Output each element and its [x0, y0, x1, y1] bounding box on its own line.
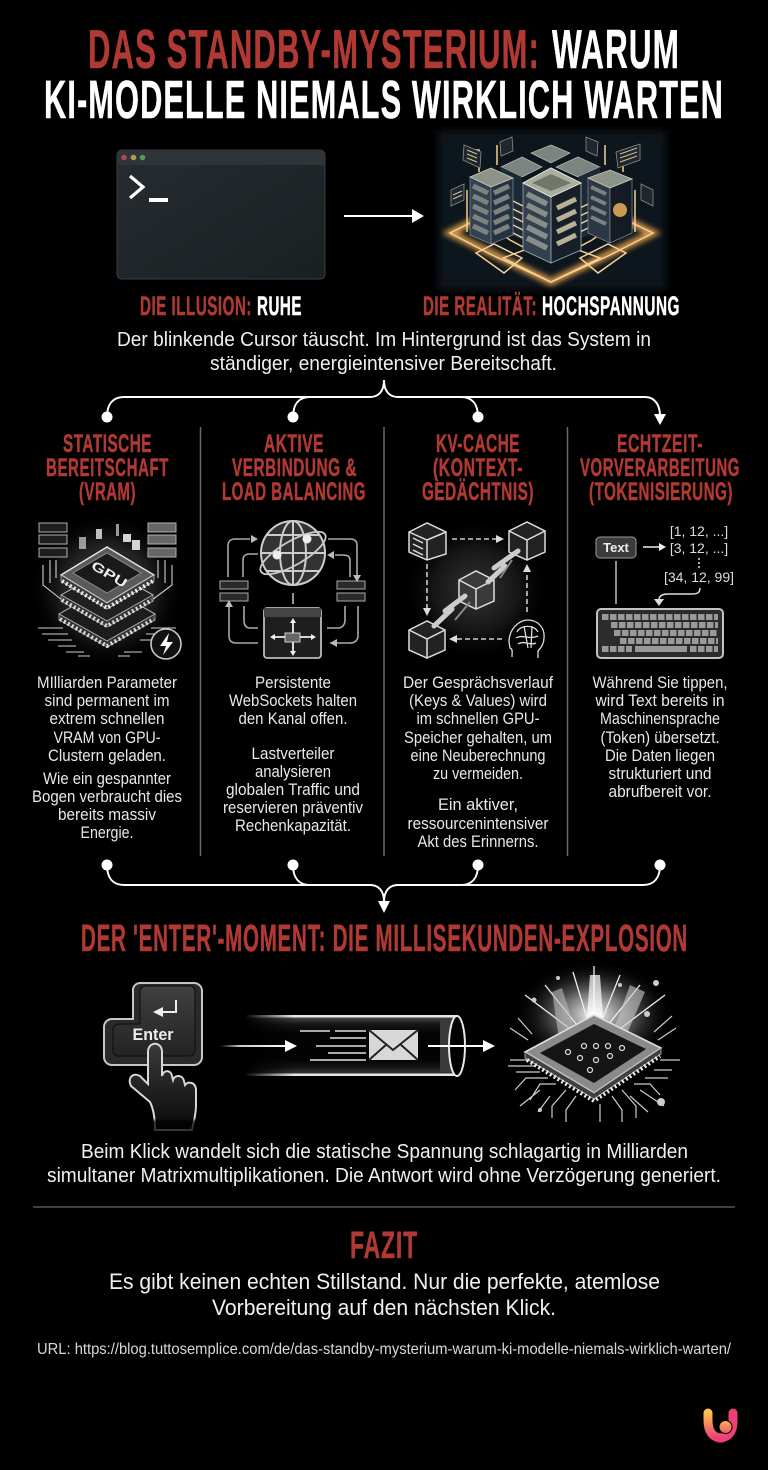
enter moment text: [47, 1141, 721, 1187]
text: real-time tokenization: [592, 673, 728, 801]
conclusion text: Es gibt keinen echten Stillstand. Nur die perfekte, atemlose: [109, 1269, 660, 1294]
text: active connection: Lastverteiler: [252, 744, 335, 763]
enter moment text: Beim Klick wandelt sich die statische Spannung schlagartig in Milliarden: [81, 1141, 688, 1163]
icon: GPU chip: [29, 512, 185, 668]
arrow: out of the tube: [428, 1040, 495, 1052]
text: static readiness: bereits massiv: [58, 805, 156, 824]
icon: data tube with envelope: [244, 1013, 465, 1078]
text: active connection: Rechenkapazität.: [235, 816, 351, 835]
icon: enter key with hand: Enter: [132, 1025, 174, 1044]
icon: server cluster: [438, 130, 666, 290]
conclusion text: Vorbereitung auf den nächsten Klick.: [212, 1295, 556, 1320]
text: active connection: Persistente: [255, 673, 331, 692]
text: static readiness: VRAM von GPU-: [54, 728, 160, 747]
text: static readiness: Energie.: [80, 823, 134, 842]
text: static readiness: Wie ein gespannter: [43, 769, 171, 788]
icon: text to tokens and keyboard: Text: [603, 540, 630, 555]
intro text: ständiger, energieintensiver Bereitschaft.: [210, 353, 557, 375]
text: active connection: analysieren: [255, 762, 331, 781]
text: real-time tokenization: Während Sie tippen,: [592, 673, 728, 692]
text: active connection: globalen Traffic und: [226, 780, 360, 799]
text: KV cache: Speicher gehalten, um: [404, 728, 552, 747]
text: active connection: den Kanal offen.: [238, 709, 348, 728]
icon: GPU chip: GPU: [89, 559, 129, 591]
text: static readiness: Bogen verbraucht dies: [32, 787, 182, 806]
heading: active connection: AKTIVE: [264, 430, 324, 458]
heading: KV cache: GEDÄCHTNIS): [422, 478, 534, 506]
text: static readiness: MIlliarden Parameter: [37, 673, 177, 692]
text: KV cache: eine Neuberechnung: [410, 746, 546, 765]
heading: real-time tokenization: [580, 430, 740, 506]
text: real-time tokenization: abrufbereit vor.: [608, 782, 712, 801]
arrow: into the tube: [220, 1040, 297, 1052]
heading: active connection: LOAD BALANCING: [222, 478, 366, 506]
text: static readiness: sind permanent im: [44, 691, 170, 710]
enter moment text: simultaner Matrixmultiplikationen. Die Antwort wird ohne Verzögerung generiert.: [47, 1165, 721, 1187]
heading: KV cache: [422, 430, 534, 506]
label: illusion: DIE ILLUSION:: [140, 291, 252, 321]
icon: exploding processor: [508, 960, 680, 1122]
text: KV cache: ressourcenintensiver: [408, 814, 549, 833]
text: static readiness: extrem schnellen: [50, 709, 164, 728]
heading: KV cache: (KONTEXT-: [433, 454, 523, 482]
icon: globe and load balancer: [220, 521, 365, 658]
heading: active connection: VERBINDUNG &: [232, 454, 357, 482]
intro text: Der blinkende Cursor täuscht. Im Hintergrund ist das System in: [117, 329, 651, 351]
heading: conclusion: FAZIT: [350, 1225, 418, 1267]
intro text: [117, 329, 651, 375]
text: real-time tokenization: Die Daten liegen: [605, 746, 715, 765]
icon: text to tokens and keyboard: [596, 523, 734, 658]
panel: static readiness: [29, 430, 185, 842]
text: static readiness: [32, 673, 182, 842]
title: [44, 18, 724, 130]
heading: static readiness: BEREITSCHAFT: [46, 454, 169, 482]
heading: static readiness: (VRAM): [79, 478, 136, 506]
panel: real-time tokenization: [580, 430, 740, 801]
text: active connection: [223, 673, 363, 835]
text: KV cache: Ein aktiver,: [438, 795, 518, 814]
conclusion text: [109, 1269, 660, 1320]
text: KV cache: (Keys & Values) wird: [409, 691, 547, 710]
text: real-time tokenization: strukturiert und: [608, 764, 712, 783]
text: active connection: WebSockets halten: [229, 691, 357, 710]
text: KV cache: zu vermeiden.: [433, 764, 523, 783]
icon: text to tokens and keyboard: [1, 12, ...]: [670, 523, 728, 539]
icon: chained memory cubes: [404, 518, 548, 662]
text: KV cache: [403, 673, 553, 851]
text: KV cache: Der Gesprächsverlauf: [403, 673, 553, 692]
text: real-time tokenization: (Token) übersetzt.: [600, 728, 720, 747]
heading: static readiness: [46, 430, 169, 506]
text: KV cache: Akt des Erinnerns.: [418, 832, 538, 851]
text: real-time tokenization: Maschinensprache: [600, 709, 720, 728]
heading: active connection: [222, 430, 366, 506]
bottom merging connector: [102, 860, 666, 913]
panel: KV cache: [403, 430, 553, 851]
arrow: illusion to reality: [344, 209, 424, 223]
heading: KV cache: KV-CACHE: [436, 430, 520, 458]
text: real-time tokenization: wird Text bereits in: [595, 691, 724, 710]
icon: text to tokens and keyboard: [34, 12, 99]: [664, 569, 734, 585]
source URL: URL: https://blog.tuttosemplice.com/de/das-standby-mysterium-warum-ki-modelle-niemals-wirklich-warten/: [37, 1341, 732, 1358]
text: static readiness: Clustern geladen.: [48, 746, 166, 765]
text: KV cache: im schnellen GPU-: [416, 709, 540, 728]
heading: real-time tokenization: ECHTZEIT-: [617, 430, 703, 458]
icon: enter key with hand: [104, 983, 202, 1134]
heading: static readiness: STATISCHE: [63, 430, 152, 458]
icon: terminal window: [117, 150, 325, 279]
label: reality: DIE REALITÄT:: [423, 291, 537, 321]
column dividers: [200, 427, 568, 856]
icon: text to tokens and keyboard: [3, 12, ...]: [670, 540, 728, 556]
top branching connector: [102, 380, 666, 425]
panel: active connection: [220, 430, 366, 835]
text: active connection: reservieren präventiv: [223, 798, 363, 817]
icon: logo: [708, 1413, 733, 1438]
label: illusion: RUHE: [257, 291, 302, 321]
